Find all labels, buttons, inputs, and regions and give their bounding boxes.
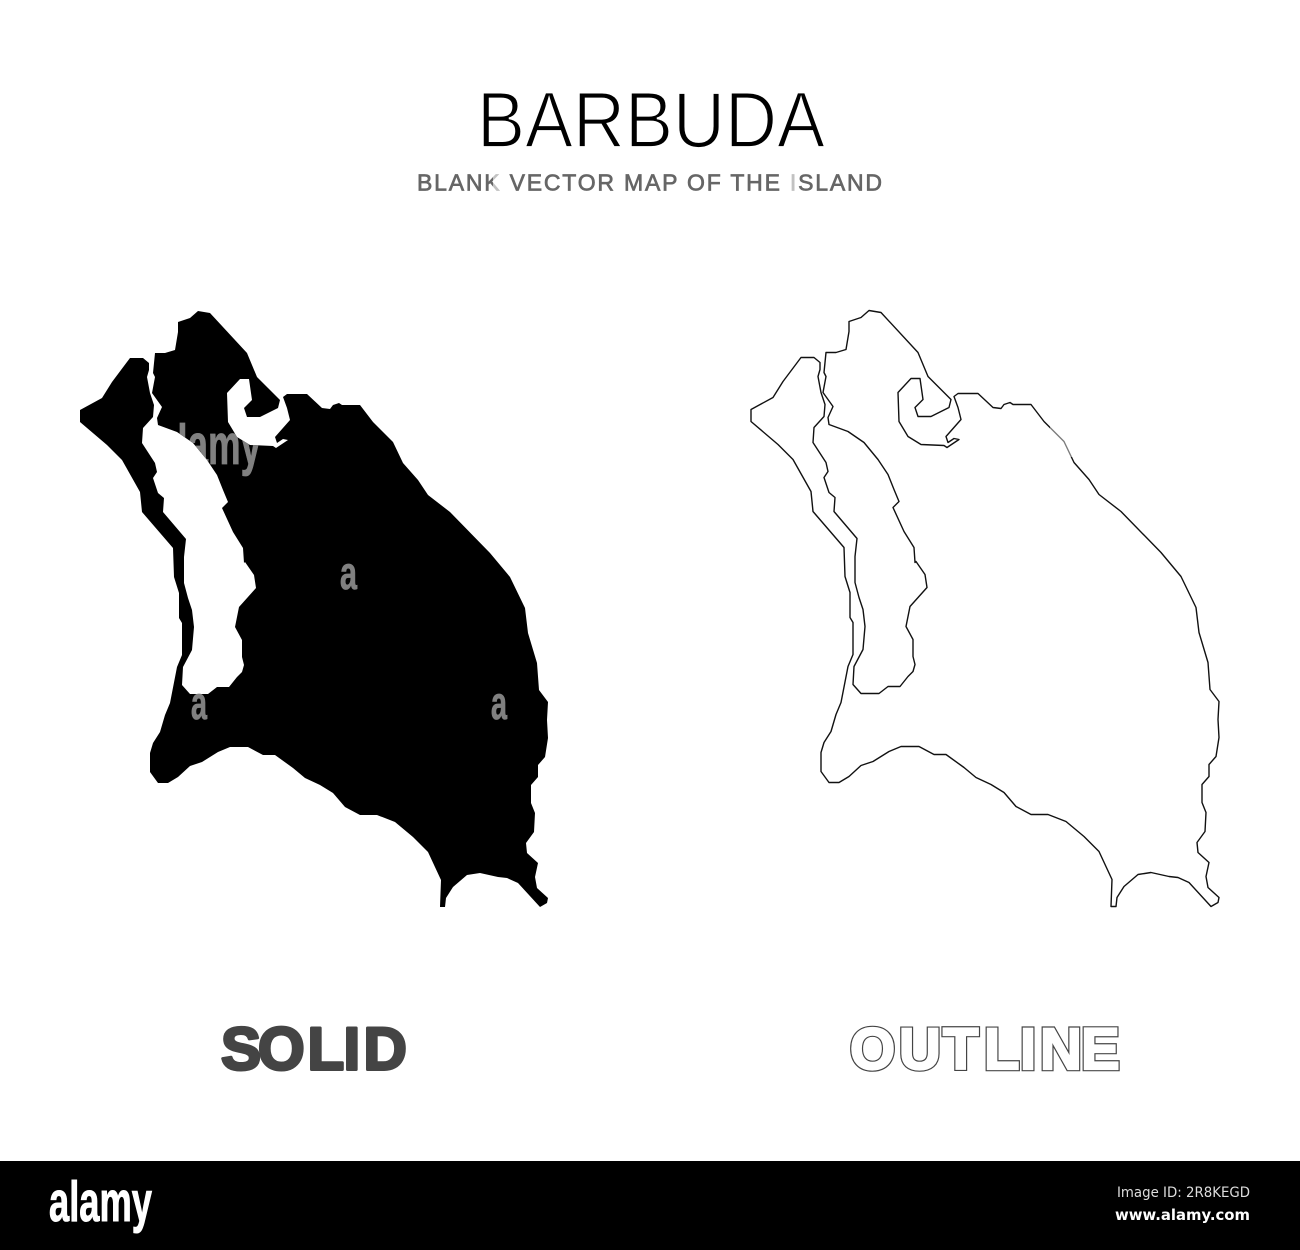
website: www.alamy.com bbox=[1115, 1206, 1250, 1224]
label: outline: OUTLINE bbox=[850, 1017, 1120, 1082]
watermark on solid map bbox=[180, 422, 508, 720]
outline map of Barbuda bbox=[751, 310, 1219, 906]
subtitle: BLANK VECTOR MAP OF THE ISLAND bbox=[417, 170, 882, 196]
footer logo: alamy bbox=[49, 1170, 152, 1234]
title: BARBUDA bbox=[477, 75, 825, 164]
image id: Image ID: 2R8KEGD bbox=[1117, 1185, 1250, 1201]
label: outline: OUTLINE bbox=[850, 1017, 1120, 1082]
watermark on solid map: alamy bbox=[157, 413, 261, 477]
watermark on solid map: a bbox=[491, 677, 507, 729]
watermark on solid map: a bbox=[340, 547, 357, 599]
label: solid: SOLID bbox=[221, 1016, 407, 1082]
footer bar bbox=[0, 1161, 1300, 1250]
watermark on solid map: a bbox=[191, 677, 207, 729]
solid map of Barbuda bbox=[80, 311, 548, 907]
